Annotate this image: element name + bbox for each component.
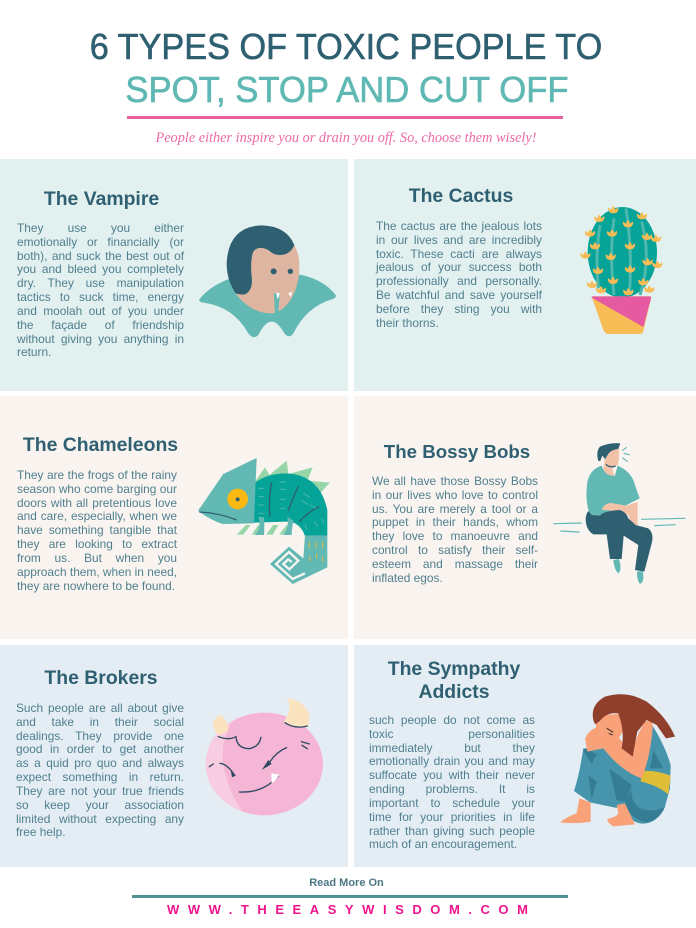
panel: the bossy bobs bbox=[354, 396, 696, 639]
text: the chameleon: season who come barging our bbox=[17, 482, 177, 496]
heading: the bossy bobs: The Bossy Bobs bbox=[384, 441, 530, 462]
text: the cactus: The cactus are the jealous lots bbox=[376, 219, 542, 233]
text: the brokers bbox=[16, 701, 184, 839]
text: the cactus: their thorns. bbox=[376, 316, 439, 330]
text: the cactus: professionally and personally. bbox=[376, 274, 542, 288]
heading: the vampire: The Vampire bbox=[44, 188, 159, 210]
text: the bossy bobs: esteem and massage their bbox=[372, 557, 538, 571]
text: the bossy bobs: control to satisfy their self- bbox=[372, 543, 538, 557]
text: the vampire: both), and suck the best out of bbox=[17, 249, 184, 263]
text: the brokers: They are not your true friends bbox=[16, 784, 184, 798]
text: the brokers: free help. bbox=[16, 825, 66, 839]
title line 2: SPOT, STOP AND CUT OFF bbox=[125, 69, 569, 110]
text: the cactus: jealous of your success both bbox=[376, 260, 542, 274]
panel: the brokers bbox=[0, 645, 348, 867]
title underline bbox=[127, 116, 563, 119]
heading: the cactus: The Cactus bbox=[409, 185, 513, 207]
text: the vampire: the façade of friendship bbox=[17, 318, 184, 332]
text: the vampire: tactics to suck time, energy bbox=[17, 290, 184, 304]
text: the brokers: and take in their social bbox=[16, 715, 184, 729]
text: the chameleon: from us. But when you bbox=[17, 551, 177, 565]
text: the vampire: dry. They use manipulation bbox=[17, 276, 184, 290]
text: the brokers: dealings. They provide one bbox=[16, 729, 184, 743]
icon: chameleon bbox=[198, 458, 330, 584]
text: the sympathy addicts: much of an encouragement. bbox=[369, 837, 517, 851]
footer: website url: WWW.THEEASYWISDOM.COM bbox=[167, 902, 536, 917]
icon: brokers devil bbox=[200, 698, 323, 817]
text: the sympathy addicts: such people do not come as bbox=[369, 713, 535, 727]
text: the brokers: expect something in return. bbox=[16, 770, 184, 784]
text: the sympathy addicts: time for your priorities in life bbox=[369, 810, 535, 824]
text: the chameleon: and care, especially, when we bbox=[17, 509, 177, 523]
text: the vampire: return. bbox=[17, 345, 51, 359]
panel: the chameleon bbox=[0, 396, 348, 639]
text: the chameleon bbox=[17, 468, 177, 593]
text: the vampire: without giving you anything in bbox=[17, 332, 184, 346]
icon: cactus bbox=[580, 206, 662, 334]
panel: the vampire bbox=[0, 159, 348, 391]
text: the brokers: as a quid pro quo and always bbox=[16, 756, 184, 770]
icon: sympathy addict bbox=[560, 694, 675, 826]
text: the sympathy addicts: toxic personalities bbox=[369, 727, 535, 741]
text: the sympathy addicts: important to schedule your bbox=[369, 796, 535, 810]
icon: vampire bbox=[199, 225, 336, 337]
text: the cactus: Be watchful and save yourself bbox=[376, 288, 542, 302]
panel: the cactus bbox=[354, 159, 696, 391]
icon: bossy bob bbox=[553, 443, 686, 584]
text: the brokers: so keep your association bbox=[16, 798, 184, 812]
text: the bossy bobs: us. You are merely a tool or a bbox=[372, 502, 538, 516]
text: the bossy bobs: in our lives who love to control bbox=[372, 488, 538, 502]
text: the sympathy addicts: suffocate you with their never bbox=[369, 768, 535, 782]
text: the chameleon: doors with all pretentious love bbox=[17, 496, 177, 510]
text: the sympathy addicts bbox=[369, 713, 535, 851]
text: the cactus: in our lives and are incredibly bbox=[376, 233, 542, 247]
text: the cactus bbox=[376, 219, 542, 330]
heading: the sympathy addicts: The Sympathy bbox=[388, 658, 520, 680]
text: the sympathy addicts: rather than giving such people bbox=[369, 824, 535, 838]
title line 1: 6 TYPES OF TOXIC PEOPLE TO bbox=[90, 26, 602, 67]
text: the vampire bbox=[17, 221, 184, 359]
text: the cactus: before they sting you with bbox=[376, 302, 542, 316]
text: the chameleon: they are looking to extract bbox=[17, 537, 177, 551]
text: the cactus: toxic. These cacti are always bbox=[376, 247, 542, 261]
text: the bossy bobs: they love to manoeuvre and bbox=[372, 529, 538, 543]
heading: the chameleon: The Chameleons bbox=[23, 434, 178, 456]
text: the sympathy addicts: emotionally drain you and may bbox=[369, 754, 535, 768]
text: the sympathy addicts: immediately but they bbox=[369, 741, 535, 755]
text: the chameleon: they are nowhere to be found. bbox=[17, 579, 175, 593]
heading: the brokers: The Brokers bbox=[44, 667, 158, 689]
text: the bossy bobs: We all have those Bossy Bobs bbox=[372, 474, 538, 488]
panel: the sympathy addicts bbox=[354, 645, 696, 867]
text: the bossy bobs: inflated egos. bbox=[372, 571, 443, 585]
footer: read more on: Read More On bbox=[309, 877, 384, 889]
text: the vampire: and moolah out of you under bbox=[17, 304, 184, 318]
text: the bossy bobs bbox=[372, 474, 538, 585]
subtitle: People either inspire you or drain you off. So, choose them wisely! bbox=[155, 130, 537, 146]
text: the chameleon: approach them, when in need, bbox=[17, 565, 177, 579]
text: the bossy bobs: puppet in their hands, whom bbox=[372, 515, 538, 529]
text: the sympathy addicts: ending problems. It is bbox=[369, 782, 535, 796]
text: the vampire: emotionally or financially (or bbox=[17, 235, 184, 249]
text: the brokers: Such people are all about give bbox=[16, 701, 184, 715]
text: the vampire: you and bleed you completely bbox=[17, 262, 184, 276]
text: the vampire: They use you either bbox=[17, 221, 184, 235]
footer divider bbox=[132, 895, 568, 898]
heading: the sympathy addicts bbox=[388, 658, 520, 703]
text: the chameleon: have something tangible that bbox=[17, 523, 177, 537]
heading: the sympathy addicts: Addicts bbox=[418, 681, 490, 703]
text: the brokers: good in order to get another bbox=[16, 742, 184, 756]
text: the brokers: limited without expecting any bbox=[16, 812, 184, 826]
text: the chameleon: They are the frogs of the rainy bbox=[17, 468, 177, 482]
